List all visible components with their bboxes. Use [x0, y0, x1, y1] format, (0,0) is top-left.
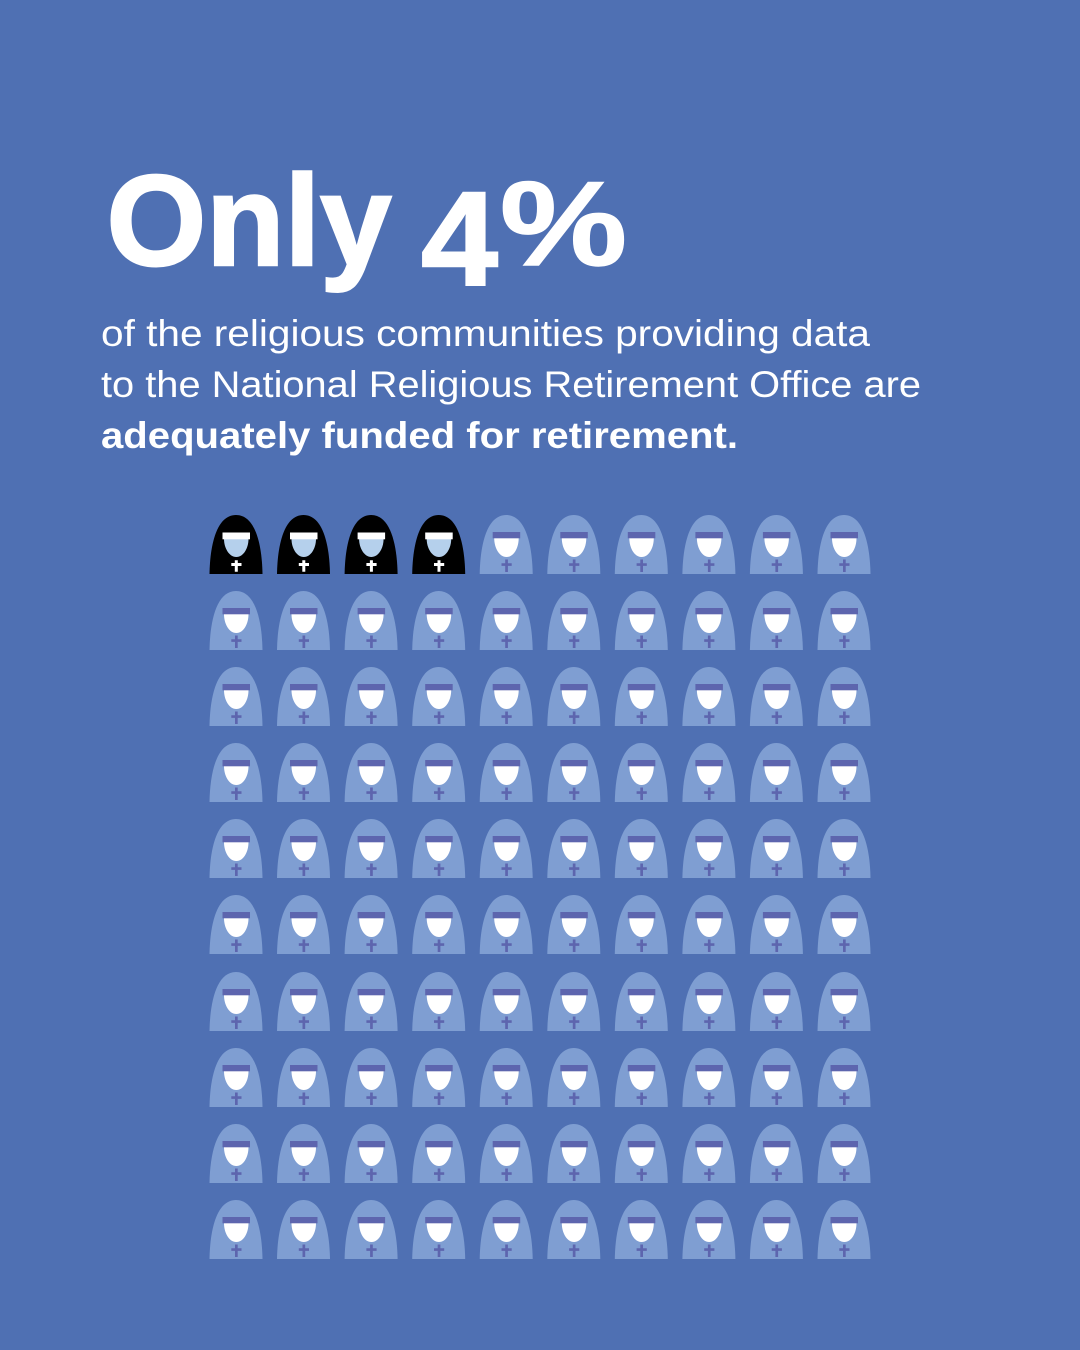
title: Only: [106, 149, 392, 293]
title: %: [500, 157, 627, 291]
icons: remaining first row: [480, 515, 870, 574]
text block: description: to the National Religious Retirement Office are: [101, 364, 921, 405]
pictogram chart: 4 of 100 nuns highlighted: [210, 515, 870, 1259]
text block: description: of the religious communities providing data: [101, 313, 870, 354]
title: 4: [421, 165, 498, 314]
icons: remaining 90 percent rows: [210, 591, 870, 1259]
title: [106, 149, 627, 314]
text block: description: adequately funded for retirement.: [101, 415, 738, 456]
icons: highlighted 4 percent: [210, 515, 465, 574]
text block: description: [101, 313, 921, 456]
